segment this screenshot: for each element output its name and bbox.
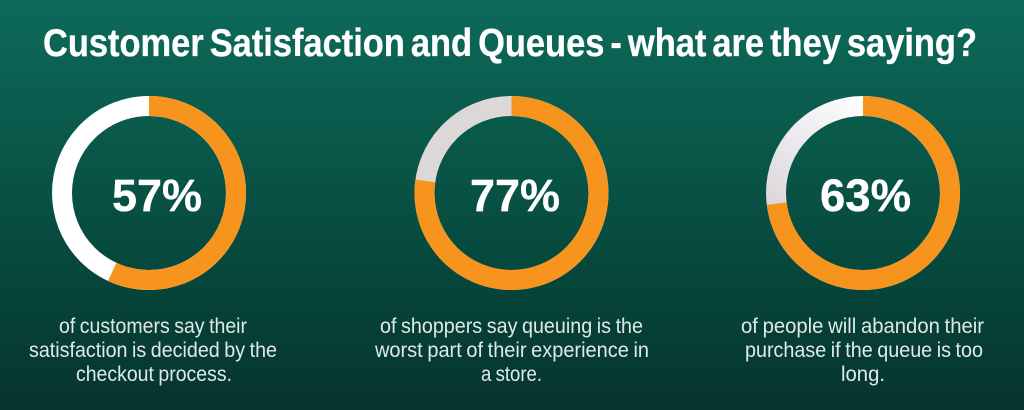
donut chart: 57% bbox=[62, 106, 236, 280]
description: shoppers bbox=[374, 314, 649, 386]
panel: 77% shoppers bbox=[374, 106, 649, 386]
panel: 63% people bbox=[741, 106, 984, 386]
description: customers: checkout process. bbox=[76, 362, 232, 386]
description: customers bbox=[29, 314, 277, 386]
value: 63%: 63% bbox=[820, 170, 911, 221]
description: people: long. bbox=[841, 362, 885, 386]
donut chart: 63% bbox=[776, 106, 950, 280]
description: customers: of customers say their bbox=[59, 314, 247, 338]
description: shoppers: worst part of their experience in bbox=[374, 338, 649, 362]
description: shoppers: a store. bbox=[481, 362, 542, 386]
description: people: of people will abandon their bbox=[741, 314, 984, 338]
description: customers: satisfaction is decided by the bbox=[29, 338, 277, 362]
description: shoppers: of shoppers say queuing is the bbox=[380, 314, 643, 338]
value: 77%: 77% bbox=[470, 170, 560, 221]
donut chart: 77% bbox=[424, 106, 598, 280]
description: people: purchase if the queue is too bbox=[745, 338, 983, 362]
panel: 57% customers bbox=[29, 106, 277, 386]
description: people bbox=[741, 314, 984, 386]
value: 57%: 57% bbox=[112, 170, 202, 221]
